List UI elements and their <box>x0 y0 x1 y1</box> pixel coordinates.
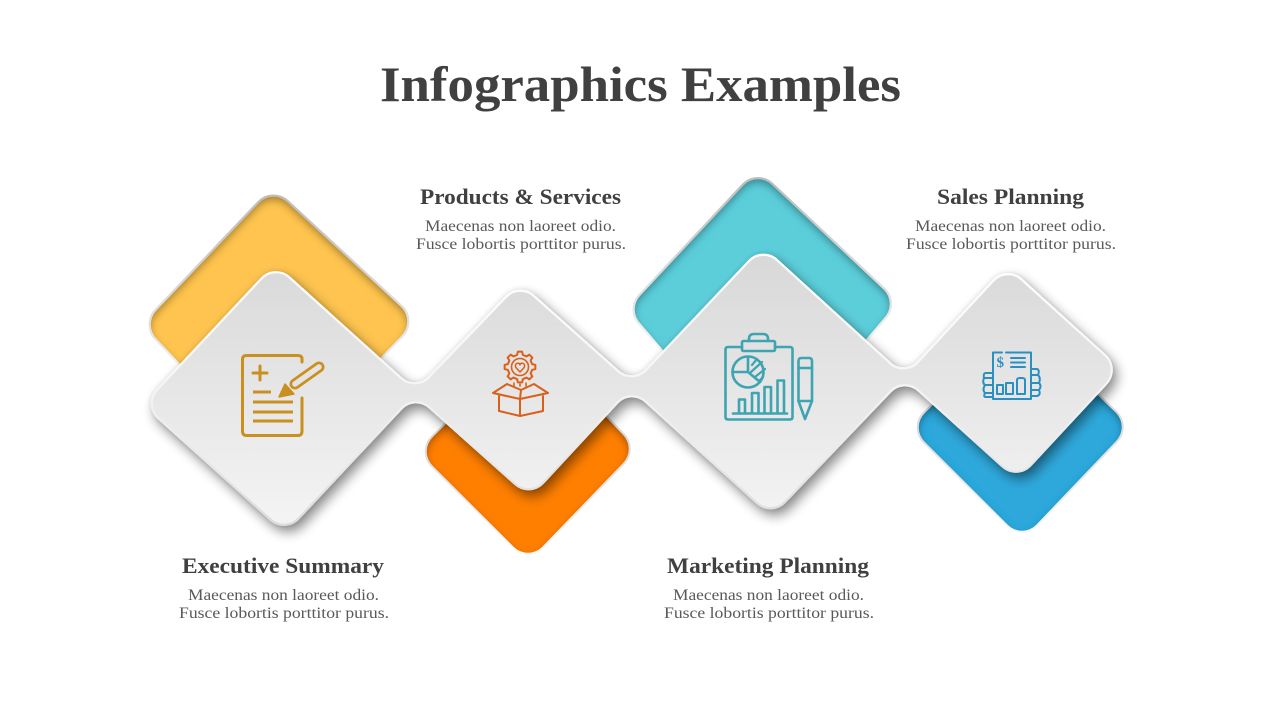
text block: Executive Summary: Maecenas non laoreet odio. <box>188 587 379 604</box>
text block: Executive Summary: Executive Summary <box>182 553 384 578</box>
text block: Sales Planning: Sales Planning <box>937 184 1084 209</box>
icon: box with gear <box>493 352 548 416</box>
panel: connected gray diamond ribbon <box>152 255 1112 525</box>
text block: Products & Services <box>416 184 626 253</box>
title: Infographics Examples <box>380 56 901 112</box>
panel: blue back diamond <box>919 378 1122 531</box>
text block: Products & Services: Fusce lobortis porttitor purus. <box>416 236 626 253</box>
panel: yellow back diamond <box>151 197 407 400</box>
text block: Marketing Planning: Maecenas non laoreet odio. <box>673 587 864 604</box>
text block: Sales Planning <box>906 184 1116 253</box>
text block: Marketing Planning: Fusce lobortis porttitor purus. <box>664 605 874 622</box>
text block: Executive Summary <box>179 553 389 622</box>
text block: Sales Planning: Fusce lobortis porttitor purus. <box>906 236 1116 253</box>
icon: document with pencil <box>242 356 319 436</box>
icon: financial report with coins <box>983 352 1040 399</box>
text block: Products & Services: Maecenas non laoreet odio. <box>425 218 616 235</box>
text block: Marketing Planning <box>664 553 874 622</box>
panel: teal back diamond <box>635 179 890 370</box>
panel: orange back diamond <box>427 400 629 553</box>
text block: Products & Services: Products & Services <box>420 184 621 209</box>
text block: Sales Planning: Maecenas non laoreet odio. <box>915 218 1106 235</box>
icon: financial report with coins: $ <box>996 355 1004 371</box>
text block: Marketing Planning: Marketing Planning <box>667 553 869 578</box>
text block: Executive Summary: Fusce lobortis porttitor purus. <box>179 605 389 622</box>
icon: clipboard with charts and pencil <box>726 334 812 420</box>
